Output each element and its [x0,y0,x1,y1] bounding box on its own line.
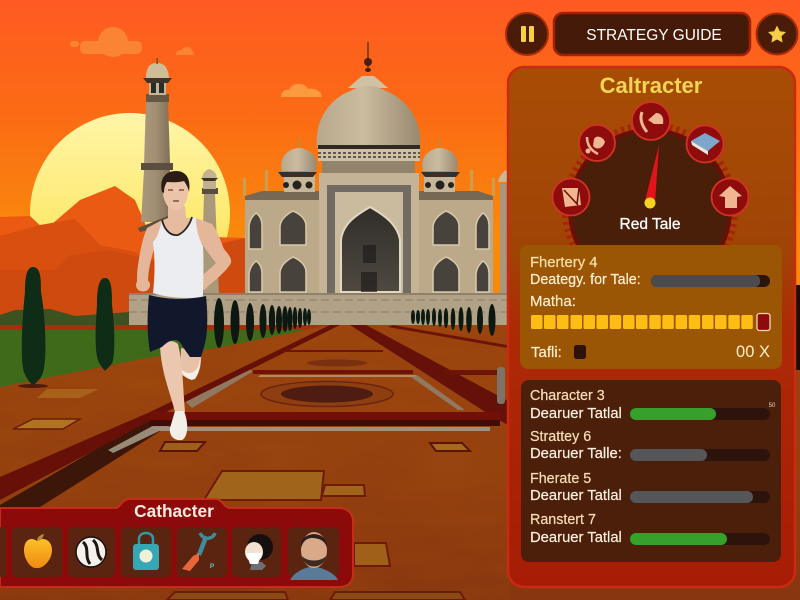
tray title: Cathacter [134,501,214,521]
characters sub-panel: Character 3 [530,388,605,404]
strategy sub-panel [520,245,782,369]
characters sub-panel: Ranstert 7 [530,512,596,528]
medallion [261,382,393,406]
cypress rows [214,298,496,348]
hair [161,171,189,193]
tafli swatch [574,345,586,359]
pause button [506,13,548,55]
inner border line [411,375,465,410]
sky background [0,0,800,340]
strategy guide button: STRATEGY GUIDE [586,27,722,44]
floor tiles [204,471,324,500]
strategy sub-panel: 00 X [736,343,770,361]
dome drum [318,145,420,175]
mountains [0,186,245,320]
left great minaret [138,58,173,232]
plinth [129,294,507,325]
characters sub-panel: Dearuer Tatlal [530,530,622,546]
right arm [193,217,231,288]
setting sun [30,113,230,313]
segment meter [531,314,770,330]
strategy bar [651,275,770,287]
characters sub-panel: Strattey 6 [530,429,591,445]
small dome right [421,138,460,192]
slot: portrait [288,527,339,580]
neck and chest [156,206,200,240]
back leg [180,348,201,380]
characters sub-panel: Dearuer Tatlal [530,488,622,504]
characters sub-panel: Fherate 5 [530,471,591,487]
side wing alcoves [249,211,489,292]
upper transverse band [253,370,413,374]
characters sub-panel: Dearuer Tatlal [530,406,622,422]
slot: apple [12,527,62,577]
far right minaret [498,170,507,294]
side wings [245,192,493,293]
gauge icon: tools [579,125,615,161]
corner spires [243,170,495,196]
right walkway border [350,325,510,426]
lantern post [497,367,505,404]
fherate 5 bar [630,491,770,503]
left arm [137,220,162,283]
Taj Mahal [129,42,507,325]
left walkway border [0,325,340,500]
slot: padlock [121,527,171,577]
far right strip [388,325,507,348]
slot: partial [0,527,6,577]
main dome finial [348,42,388,88]
character tray [0,499,353,587]
front leg [160,341,185,412]
slot: wrench tool: P [210,563,215,570]
gauge icon: book [686,126,724,162]
tank top [153,217,203,298]
characters sub-panel [521,380,781,562]
strategy sub-panel: Matha: [530,293,576,310]
central iwan arch [341,207,400,292]
strategy sub-panel: Tafli: [531,344,562,361]
distant tree line [0,309,130,326]
face [168,190,184,201]
character 3 bar [630,408,770,420]
shorts [148,295,207,357]
characters sub-panel: 50 [769,403,776,409]
slot: swirl [68,527,115,577]
central block [319,173,419,293]
main dome [317,86,420,148]
right stats panel [508,67,795,587]
gauge needle [644,145,659,208]
floor and walkway [0,325,800,600]
characters sub-panel: Dearuer Talle: [530,446,622,462]
left cypress trees [18,267,114,388]
far right edge strip [795,285,800,370]
panel title: Caltracter [600,73,703,98]
star button [756,14,798,54]
ranstert 7 bar [630,533,770,545]
strategy sub-panel: Deategy. for Tale: [530,272,641,288]
strategy sub-panel: Fhertery 4 [530,255,597,271]
strategy 6 bar [630,449,770,461]
gauge icon: house [712,178,748,216]
gauge dial [562,124,738,245]
runner [136,171,231,440]
gauge icon: wing [632,102,670,140]
left lower shadow [0,418,162,532]
main transverse band [150,412,500,420]
clouds [70,27,322,97]
right small minaret [201,169,219,295]
slot: masked face [232,527,281,577]
gauge icon: bow [552,178,590,216]
shoe [170,411,187,440]
small dome left [278,138,317,192]
head [163,172,188,210]
lawn [0,325,330,390]
gauge label: Red Tale [620,216,680,233]
strategy guide button [554,13,750,55]
slot: wrench tool [177,527,227,577]
